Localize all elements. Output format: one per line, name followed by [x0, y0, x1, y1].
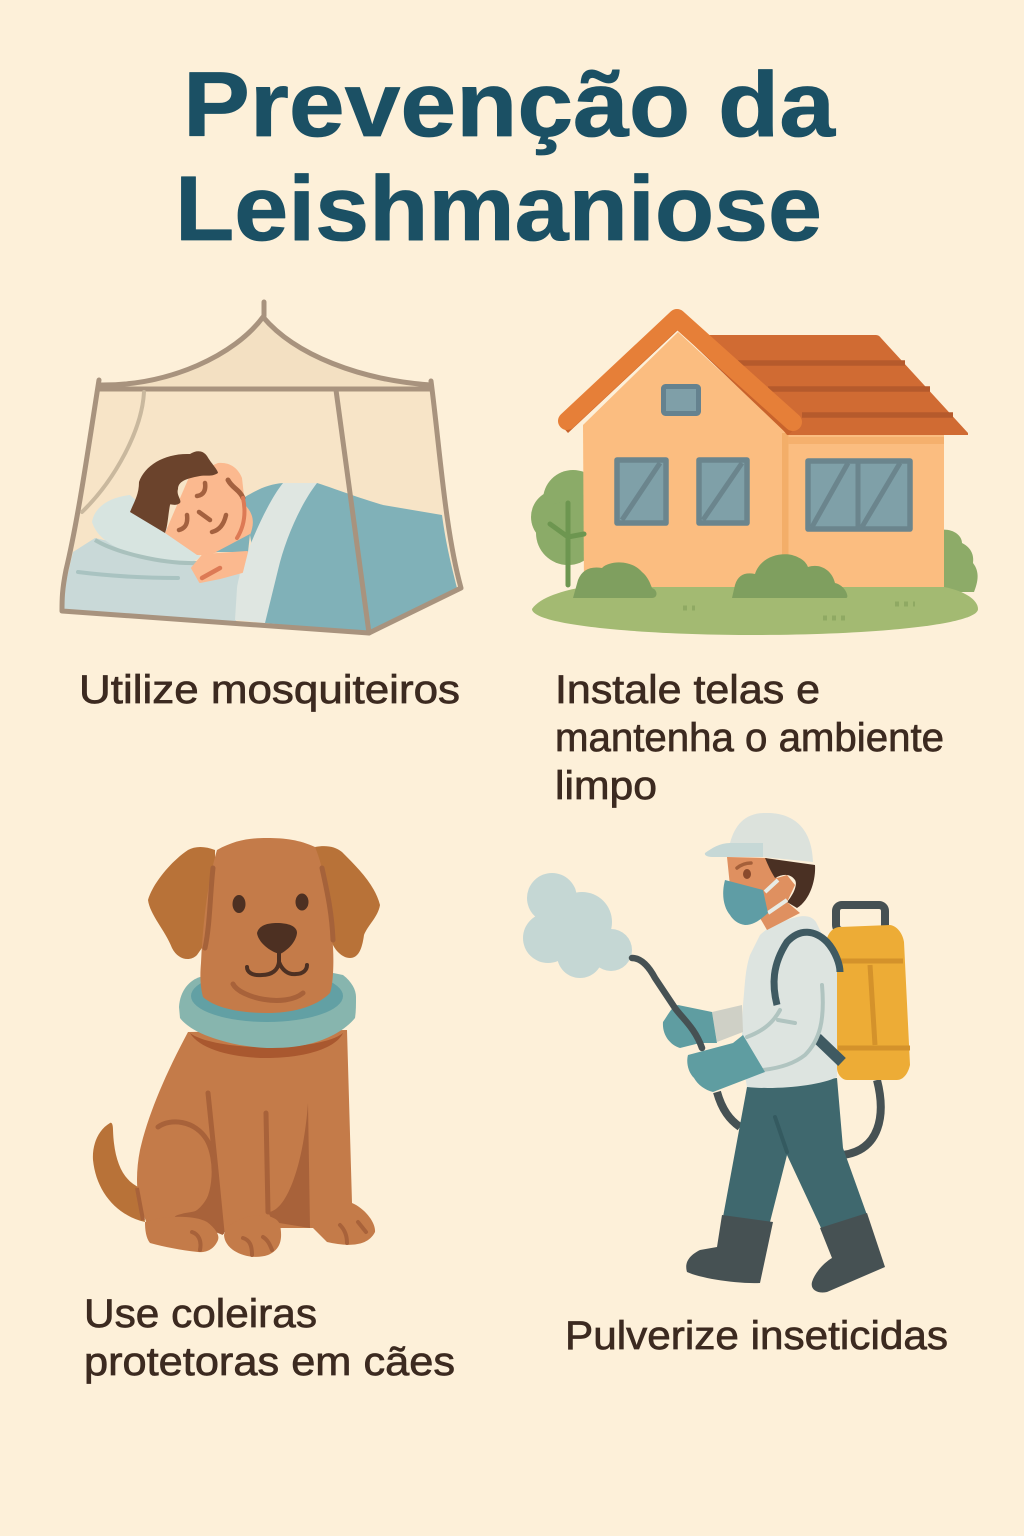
illustration: worker spraying insecticide	[523, 813, 910, 1293]
body	[137, 1030, 375, 1245]
tank handle	[836, 905, 885, 931]
eyes	[232, 895, 246, 913]
pillow	[92, 495, 200, 562]
tree trunk	[550, 503, 584, 585]
face	[165, 463, 253, 555]
bed sheet	[63, 538, 240, 622]
cap	[727, 813, 813, 862]
tail	[93, 1123, 145, 1222]
caption: protective collars: Use coleiras	[84, 1292, 317, 1336]
paws	[145, 1217, 218, 1252]
blanket fold	[235, 483, 317, 623]
caption: screens and clean environment	[555, 668, 944, 808]
collar shadow	[190, 1033, 343, 1058]
hair	[130, 451, 218, 533]
neck shadow	[216, 534, 250, 552]
sleeping face	[179, 483, 226, 532]
ears	[148, 847, 215, 959]
ear folds	[205, 868, 333, 948]
blanket	[245, 483, 457, 633]
front glove	[687, 1035, 765, 1092]
eye	[743, 869, 751, 879]
leg shadows	[178, 1177, 223, 1235]
caption: screens and clean environment: Instale telas e	[555, 668, 820, 712]
hand	[192, 552, 247, 582]
title	[175, 54, 836, 260]
mask straps	[765, 880, 787, 913]
nose	[257, 923, 297, 954]
collar	[179, 968, 356, 1048]
legs	[723, 1078, 867, 1230]
back glove	[663, 1005, 717, 1048]
lawn tufts	[683, 604, 915, 618]
caption: protective collars	[84, 1292, 455, 1384]
lawn	[532, 587, 978, 635]
hair	[765, 858, 815, 908]
hoses	[717, 1092, 740, 1127]
net fabric	[99, 317, 431, 389]
tank	[827, 925, 910, 1080]
caption: screens and clean environment: limpo	[555, 764, 657, 808]
windows	[617, 460, 910, 529]
backpack straps	[774, 932, 840, 1005]
spray cloud	[523, 873, 632, 978]
ear and neck line	[228, 480, 243, 498]
caption: spray insecticides: Pulverize inseticidas	[565, 1314, 948, 1358]
house walls	[583, 332, 788, 590]
title: Leishmaniose	[175, 158, 822, 260]
cuff	[712, 1005, 743, 1042]
illustration: house	[531, 318, 978, 635]
boots	[686, 1215, 773, 1283]
tree	[531, 490, 585, 544]
mask	[723, 880, 768, 925]
head	[200, 838, 333, 1013]
arm lines	[747, 985, 823, 1070]
attic window	[664, 386, 698, 414]
net frame	[62, 302, 461, 633]
spray wand	[632, 958, 702, 1048]
roof	[708, 335, 968, 435]
leg lines	[158, 1093, 268, 1232]
torso	[742, 916, 837, 1088]
illustration: person sleeping under mosquito net	[62, 302, 461, 633]
caption: mosquito nets: Utilize mosquiteiros	[79, 668, 460, 712]
bushes	[573, 562, 656, 598]
illustration: dog with collar	[93, 838, 380, 1257]
caption: protective collars: protetoras em cães	[84, 1340, 455, 1384]
mouth	[247, 953, 307, 975]
head skin	[727, 857, 800, 930]
right bush	[940, 530, 978, 592]
caption: screens and clean environment: mantenha o ambiente	[555, 716, 944, 760]
collar inner	[191, 970, 343, 1022]
title: Prevenção da	[183, 54, 836, 156]
